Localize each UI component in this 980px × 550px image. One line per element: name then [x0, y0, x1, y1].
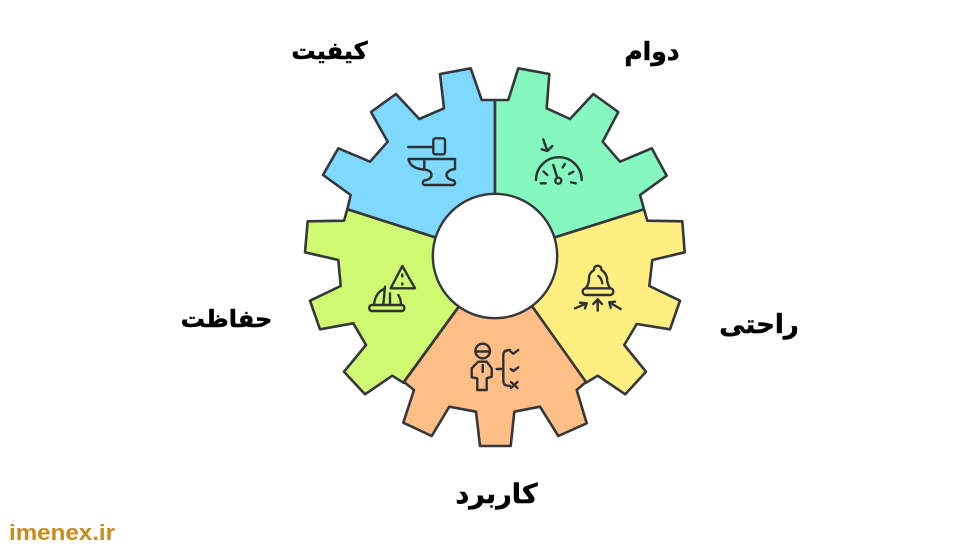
center hole	[433, 194, 557, 318]
watermark: imenex.ir	[9, 520, 115, 545]
icon: hard hat with warning triangle	[369, 266, 415, 311]
label: comfort: راحتی	[719, 310, 799, 340]
icon: speedometer gauge	[536, 139, 582, 184]
icon: bell with arrows	[575, 266, 621, 311]
icon: anvil and hammer	[408, 138, 455, 185]
segment: durability (green)	[495, 68, 667, 256]
segment: safety (lime)	[305, 209, 495, 394]
icon: person with checklist	[472, 344, 518, 390]
gear diagram	[305, 68, 685, 446]
segment: quality (blue)	[323, 68, 495, 256]
label: usability: کاربرد	[455, 479, 538, 510]
label: quality: کیفیت	[291, 37, 368, 65]
segment: comfort (yellow)	[495, 209, 685, 394]
label: safety: حفاظت	[181, 305, 272, 333]
segment: usability (orange)	[403, 256, 587, 446]
label: durability: دوام	[624, 37, 680, 67]
